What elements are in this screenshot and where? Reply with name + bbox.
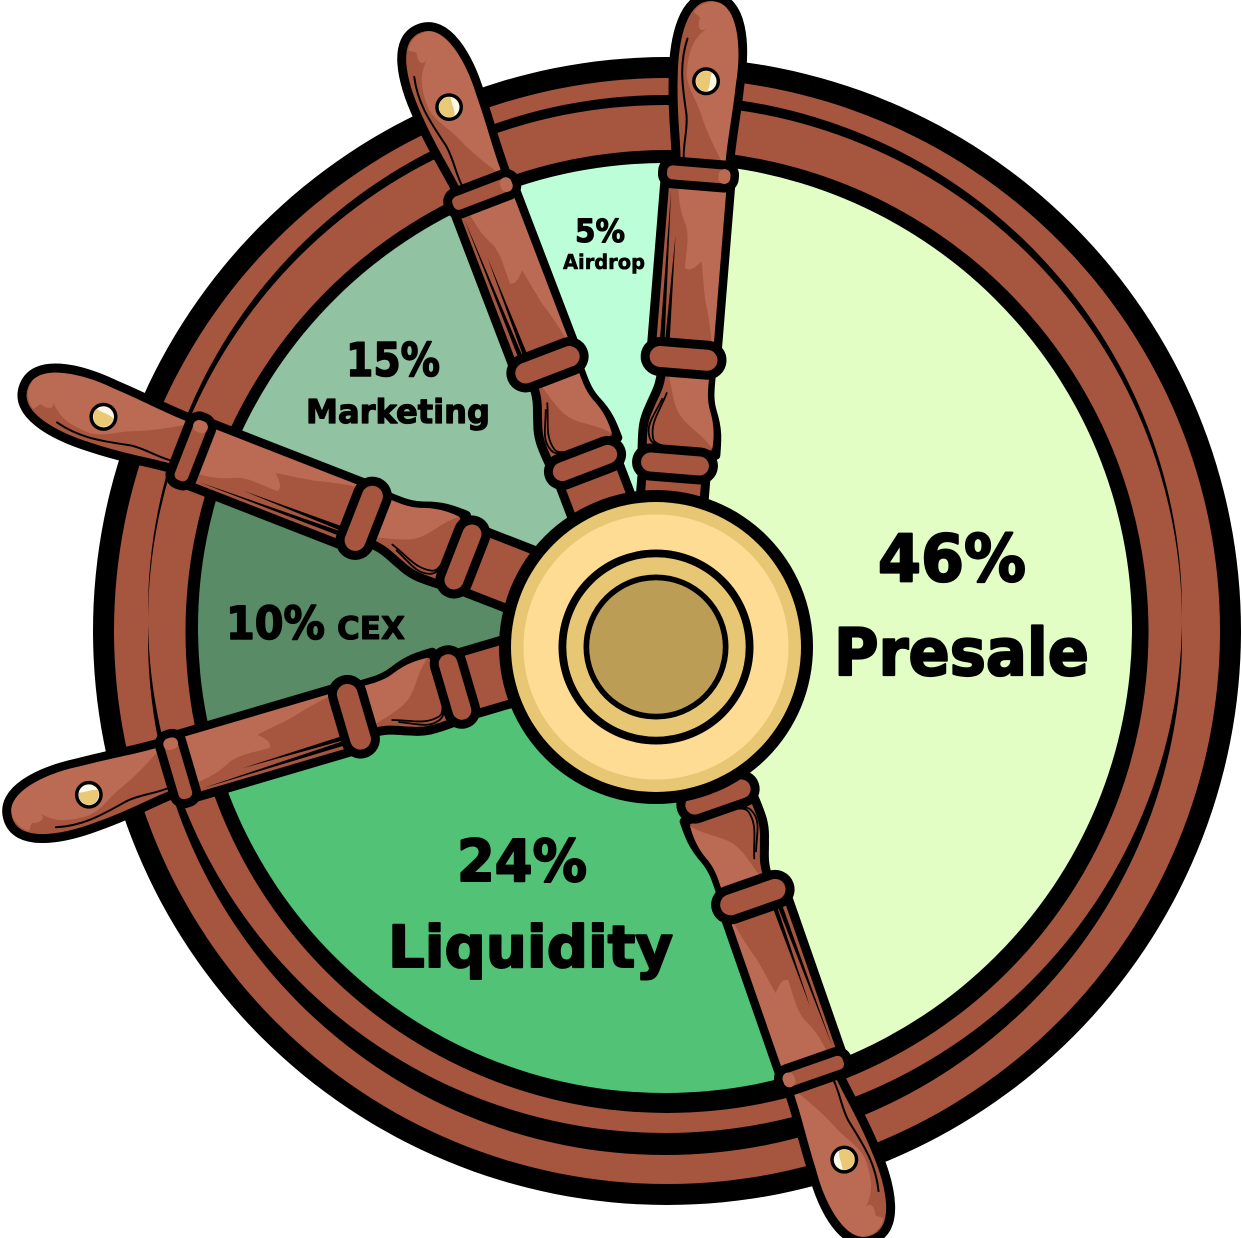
label: Liquidity: 24%: [457, 827, 587, 895]
slice: Presale 46%: [708, 168, 1132, 1055]
label: CEX: 10%: [226, 597, 325, 650]
spoke: top left: [383, 14, 650, 551]
label: Presale: 46%: [878, 522, 1026, 597]
label: Airdrop: 5%: [575, 212, 625, 250]
label: CEX: CEX: [337, 611, 405, 647]
pie chart: [198, 163, 1132, 1093]
spoke: left lower: [0, 626, 542, 855]
label: Liquidity: [388, 827, 673, 981]
label: Marketing: 15%: [346, 333, 440, 387]
slice: Marketing 15%: [242, 216, 568, 546]
label: Liquidity: Liquidity: [388, 913, 673, 981]
spoke: left upper: [10, 348, 553, 622]
label: Airdrop: Airdrop: [563, 250, 645, 274]
wheel hub: [499, 490, 813, 804]
label: Presale: Presale: [834, 616, 1089, 691]
slice: Liquidity 24%: [228, 708, 775, 1093]
label: Marketing: [306, 333, 490, 431]
label: Presale: [834, 522, 1089, 691]
slice: CEX 10%: [198, 501, 503, 721]
slice: Airdrop 5%: [520, 163, 660, 492]
spoke: top right: [630, 0, 753, 547]
label: Airdrop: [563, 212, 645, 274]
spoke: bottom: [654, 709, 909, 1238]
label: CEX: [226, 597, 405, 650]
label: Marketing: Marketing: [306, 392, 490, 431]
